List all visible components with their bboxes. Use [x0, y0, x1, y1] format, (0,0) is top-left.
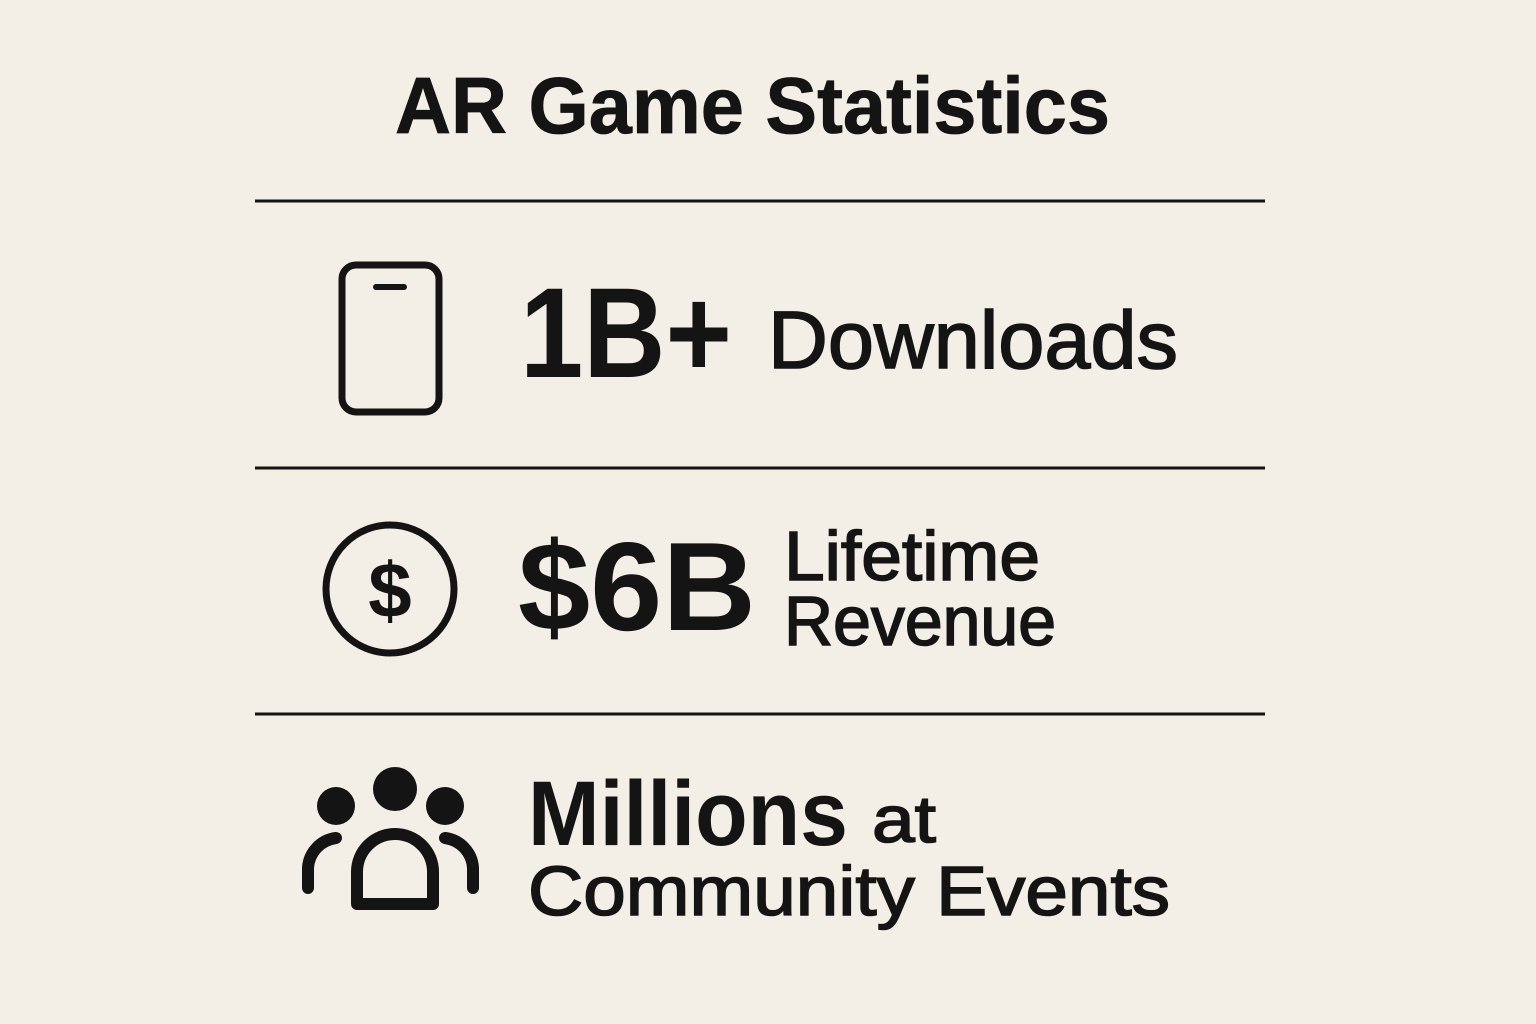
icon: phone — [342, 265, 439, 412]
stat: 1B+: 1B+ — [520, 262, 732, 405]
label: Lifetime Revenue: Lifetime — [784, 517, 1040, 595]
icon: dollar coin: $ — [368, 546, 412, 634]
stat: $6B: $6B — [518, 516, 756, 657]
panel: community — [308, 763, 1170, 930]
stat: Millions at: Millions — [528, 763, 848, 865]
label: Downloads: Downloads — [768, 295, 1178, 386]
label: Lifetime Revenue — [784, 517, 1056, 660]
panel: revenue — [326, 516, 1056, 660]
label: Lifetime Revenue: Revenue — [784, 582, 1056, 660]
stat: Millions at: at — [872, 782, 936, 856]
icon: people — [308, 767, 473, 904]
panel: downloads — [342, 262, 1178, 412]
icon: dollar coin — [326, 525, 454, 653]
title: AR Game Statistics — [395, 61, 1110, 150]
label: Community Events: Community Events — [528, 852, 1170, 930]
